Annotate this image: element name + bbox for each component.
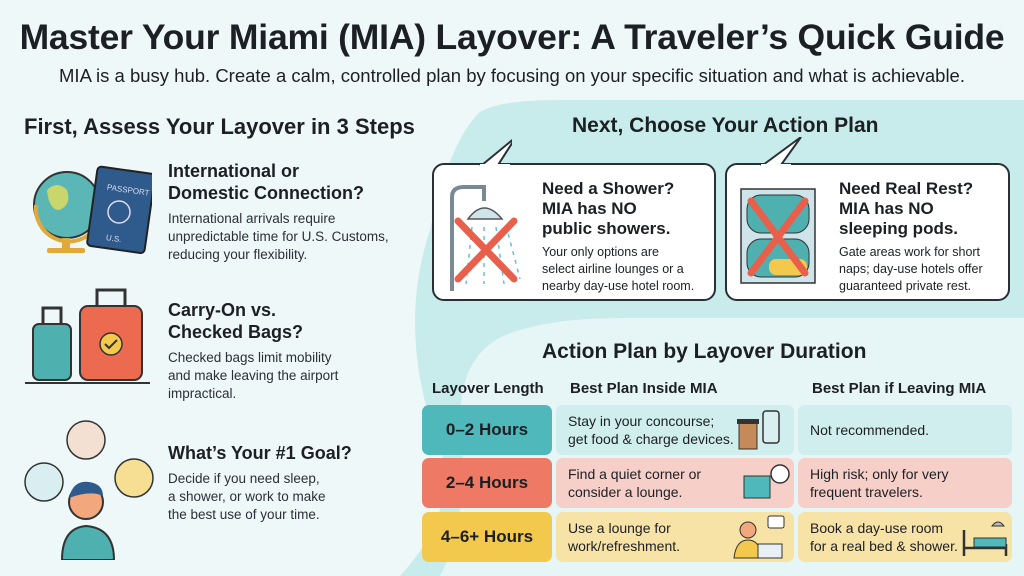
icon: globe and passport: U.S. bbox=[105, 233, 122, 244]
table: for a real bed & shower. bbox=[810, 538, 958, 554]
step 3 text: What’s Your #1 Goal? bbox=[168, 443, 352, 463]
table: Find a quiet corner or bbox=[568, 466, 701, 482]
step 1 text: Domestic Connection? bbox=[168, 183, 364, 203]
card: rest: naps; day-use hotels offer bbox=[839, 262, 983, 276]
card: rest: MIA has NO bbox=[839, 199, 934, 218]
step 3 text bbox=[168, 443, 352, 522]
card: rest: guaranteed private rest. bbox=[839, 279, 971, 293]
table: Book a day-use room bbox=[810, 520, 943, 536]
row 0-2: 0–2 Hours bbox=[446, 420, 528, 439]
title: Master Your Miami (MIA) Layover: A Traveler’s Quick Guide bbox=[20, 17, 1004, 57]
step 1 text: International or bbox=[168, 161, 299, 181]
section heading: assess: First, Assess Your Layover in 3 Steps bbox=[24, 114, 415, 139]
table: Not recommended. bbox=[810, 422, 929, 438]
card: rest bbox=[725, 163, 1010, 301]
section heading: action plan: Next, Choose Your Action Plan bbox=[572, 114, 878, 137]
row 4-6: 4–6+ Hours bbox=[441, 527, 533, 546]
table: frequent travelers. bbox=[810, 484, 923, 500]
card: shower: public showers. bbox=[542, 219, 670, 238]
icon: globe and passport: PASSPORT bbox=[106, 183, 150, 198]
card: shower: Need a Shower? bbox=[542, 179, 674, 198]
icon: person laptop bbox=[734, 516, 784, 558]
step 3 text: a shower, or work to make bbox=[168, 489, 326, 504]
row 2-4 bbox=[422, 458, 552, 508]
step 1 text: International arrivals require unpredictable time for U.S. Customs, reducing your flexibility. bbox=[168, 211, 389, 262]
card: shower: select airline lounges or a bbox=[542, 262, 684, 276]
section heading: duration: Action Plan by Layover Duration bbox=[542, 340, 866, 363]
step 2 text: Checked bags limit mobility bbox=[168, 350, 332, 365]
icon: coffee and phone bbox=[737, 410, 780, 450]
card: shower: Your only options are bbox=[542, 245, 659, 259]
step 1 text bbox=[168, 161, 389, 262]
table: work/refreshment. bbox=[568, 538, 680, 554]
step 3 text: Decide if you need sleep, bbox=[168, 471, 320, 486]
step 2 text: and make leaving the airport bbox=[168, 368, 338, 383]
icon: chair and clock bbox=[744, 464, 790, 498]
table headers: Layover Length bbox=[432, 380, 544, 397]
step 2 text: impractical. bbox=[168, 386, 236, 401]
card: shower: nearby day-use hotel room. bbox=[542, 279, 694, 293]
step 2 text: Carry-On vs. bbox=[168, 300, 276, 320]
card: rest: Gate areas work for short bbox=[839, 245, 980, 259]
icon: bed and shower bbox=[962, 522, 1008, 556]
icon: pods crossed bbox=[740, 188, 816, 284]
icon: thinking person bbox=[24, 420, 154, 560]
table: Best Plan Inside MIA bbox=[570, 380, 718, 397]
table: Stay in your concourse; bbox=[568, 413, 714, 429]
table: High risk; only for very bbox=[810, 466, 948, 482]
step 2 text: Checked Bags? bbox=[168, 322, 303, 342]
table: Best Plan if Leaving MIA bbox=[812, 380, 986, 397]
icon: globe and passport bbox=[33, 166, 152, 254]
step 2 text bbox=[168, 300, 338, 401]
row 4-6 bbox=[422, 512, 552, 562]
subtitle: MIA is a busy hub. Create a calm, controlled plan by focusing on your specific situation and what is achievable. bbox=[59, 65, 965, 86]
step 3 text: the best use of your time. bbox=[168, 507, 320, 522]
row 2-4: 2–4 Hours bbox=[446, 473, 528, 492]
card: shower bbox=[432, 163, 716, 301]
card: rest: sleeping pods. bbox=[839, 219, 958, 238]
card: rest: Need Real Rest? bbox=[839, 179, 973, 198]
icon: luggage bbox=[25, 288, 150, 384]
row 0-2 bbox=[422, 405, 552, 455]
table: get food & charge devices. bbox=[568, 431, 734, 447]
card: shower: MIA has NO bbox=[542, 199, 637, 218]
icon: shower crossed bbox=[450, 185, 521, 291]
table: Use a lounge for bbox=[568, 520, 671, 536]
table: consider a lounge. bbox=[568, 484, 682, 500]
